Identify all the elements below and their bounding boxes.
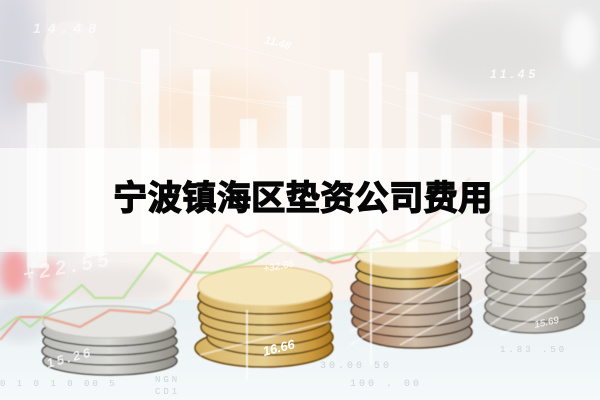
chart value labels: 16.66 (261, 336, 297, 359)
printed table numbers (0, 345, 567, 397)
trend lines (0, 150, 535, 340)
chart value labels: +22.55 (21, 248, 115, 286)
printed table numbers: 1.83 .50 (500, 345, 567, 355)
coin stack: grey right (484, 194, 586, 333)
chart value labels: 11.45 (490, 67, 539, 81)
chart value labels: 15.26 (45, 344, 95, 371)
chart value labels: 15.69 (533, 315, 561, 331)
translucent title band (0, 148, 600, 252)
chart value labels: 14.48 (33, 20, 103, 36)
chart value labels: +32.66 (263, 259, 295, 275)
grid lines (0, 10, 600, 170)
printed table numbers: CD1 (155, 387, 180, 397)
diagonal light streaks over coins (200, 240, 590, 355)
chart value labels: 11.48 (263, 34, 293, 53)
coin stack: bronze (351, 240, 472, 348)
printed table numbers: NGN (155, 375, 180, 385)
white chart bars (27, 49, 527, 380)
chart value labels (21, 20, 561, 371)
printed table numbers: 0 1 0 1 0 00 5 (0, 379, 118, 389)
printed table numbers: 100 . 00 (350, 379, 422, 390)
title: 宁波镇海区垫资公司费用 (113, 180, 492, 218)
coin stack: gold (195, 266, 333, 367)
coin stack: silver left (42, 306, 178, 375)
printed table numbers: 30.00 50 (320, 361, 392, 372)
